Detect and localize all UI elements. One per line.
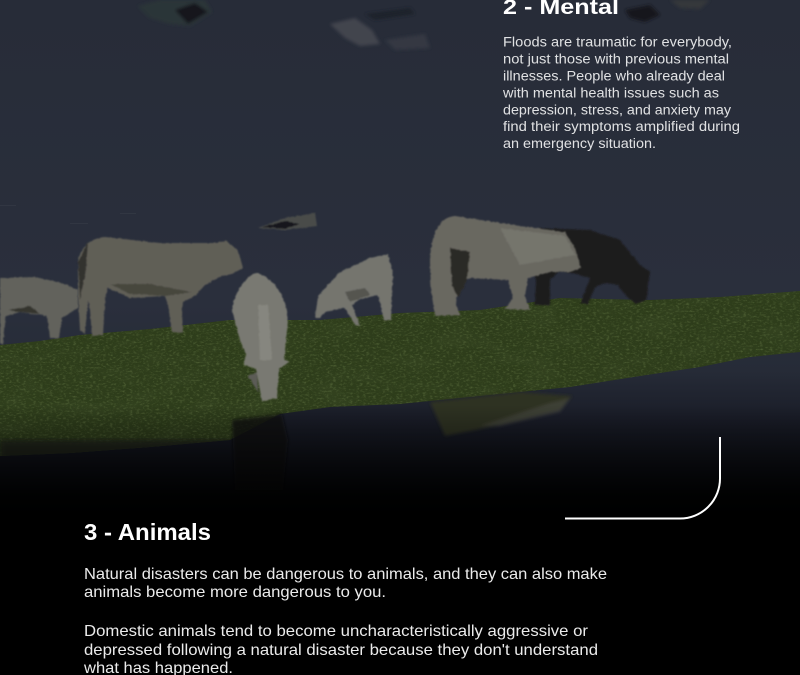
section 2: Mental [502, 0, 740, 151]
text block: mental health description: find their symptoms amplified during [503, 119, 740, 134]
text block: animals description [83, 566, 607, 675]
rocks in the water at top [138, 0, 710, 50]
curved connector line [565, 437, 720, 518]
text block: animals description: Domestic animals tend to become uncharacteristically aggressive or [84, 623, 589, 640]
grass bank [0, 285, 800, 460]
text block: mental health description: depression, stress, and anxiety may [503, 102, 731, 118]
cow: large standing [78, 237, 243, 336]
cow: large white and dark patched [430, 216, 581, 316]
cow: front grazing [232, 273, 289, 401]
text block: mental health description: an emergency situation. [503, 136, 656, 151]
text block: mental health description: illnesses. People who already deal [503, 68, 725, 84]
text block: animals description: Natural disasters can be dangerous to animals, and they can also make [84, 566, 607, 583]
text block: mental health description: not just those with previous mental [503, 52, 729, 66]
text block: mental health description: with mental health issues such as [502, 86, 719, 100]
reflection of cows in water [232, 392, 572, 490]
black fade over the bottom of the photo [0, 405, 800, 530]
overall bottom black band [0, 528, 800, 675]
text block: mental health description: Floods are traumatic for everybody, [503, 34, 732, 50]
driftwood in the water [258, 213, 317, 230]
text block: mental health description [502, 34, 740, 151]
heading: 3 - Animals: 3 - Animals [84, 519, 211, 545]
cow: far left white [0, 277, 78, 344]
section 3: Animals [83, 519, 607, 675]
text block: animals description: depressed following a natural disaster because they don't understand [84, 642, 598, 659]
cow: small grazing [315, 254, 393, 326]
cow: dark behind [530, 228, 650, 305]
text block: animals description: animals become more dangerous to you. [84, 584, 386, 601]
